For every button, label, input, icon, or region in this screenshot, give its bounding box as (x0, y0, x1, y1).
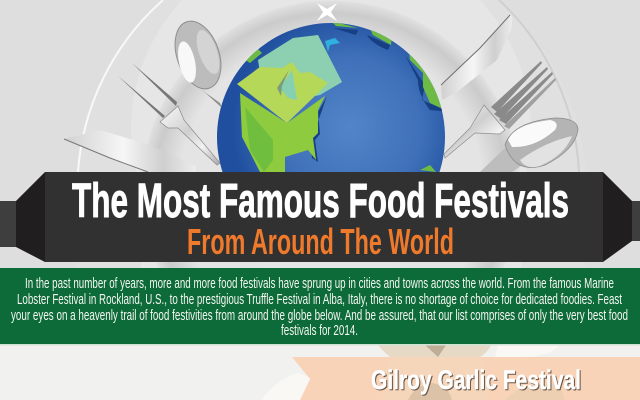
land: Canada light green (237, 62, 328, 123)
icon: plate sparkle (317, 3, 337, 21)
icon: right knife (441, 15, 512, 100)
land: cyan island (325, 38, 340, 52)
icon: right fork (444, 61, 556, 158)
festival heading: Gilroy Garlic Festival (371, 365, 581, 395)
intro text: festivals for 2014. (281, 323, 358, 339)
garlic bulbs (382, 357, 489, 400)
intro text (11, 276, 628, 339)
ribbon tails and folds (0, 172, 640, 262)
intro panel (0, 268, 640, 346)
peach festival panel (292, 357, 640, 400)
land shadows (310, 28, 450, 162)
title banner (45, 172, 603, 262)
icon: left spoon (167, 15, 229, 108)
land: Hudson Bay (280, 70, 297, 100)
globe (217, 23, 445, 172)
subtitle: From Around The World (187, 221, 454, 262)
plate (76, 0, 586, 345)
icon: left fork (118, 63, 220, 165)
garlic photo top (378, 345, 560, 357)
garlic clove left (262, 373, 310, 400)
lower background (0, 345, 640, 400)
icon: left knife (64, 130, 196, 172)
icon: right spoon (480, 118, 578, 172)
land: USA and Mexico (240, 93, 325, 172)
land: Greenland and Arctic (245, 21, 447, 172)
land: Arctic Canada teal (258, 35, 342, 100)
